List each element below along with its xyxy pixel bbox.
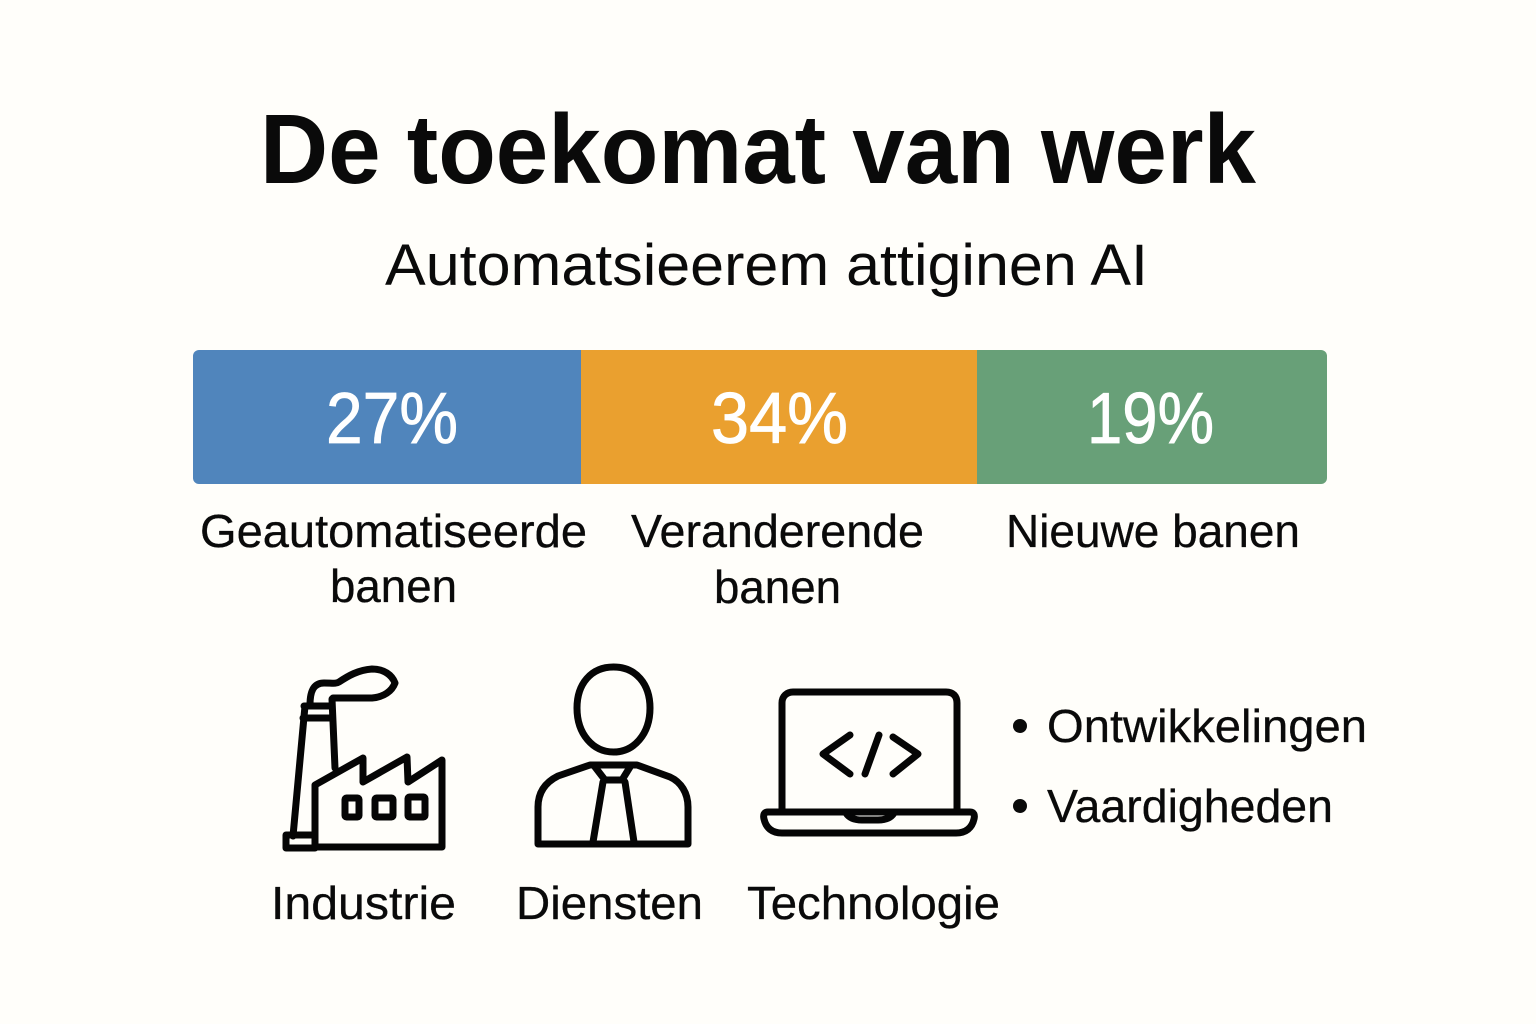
- stacked bar chart: [193, 350, 1327, 484]
- label: changing jobs: Veranderende: [631, 505, 924, 557]
- title: De toekomat van werk: [260, 94, 1256, 204]
- label: Technologie: Technologie: [747, 877, 1000, 929]
- label: automated jobs: [200, 505, 587, 612]
- bar segment: changing jobs 34%: 34%: [711, 379, 848, 459]
- label: Industrie: Industrie: [271, 877, 456, 929]
- bar segment: changing jobs 34%: [581, 350, 977, 484]
- bullet: Ontwikkelingen: Ontwikkelingen: [1047, 700, 1367, 752]
- label: automated jobs: banen: [330, 560, 457, 612]
- label: Diensten: Diensten: [516, 877, 703, 929]
- icon: laptop with code: [764, 692, 974, 833]
- label: changing jobs: banen: [714, 561, 841, 613]
- subtitle: Automatsieerem attiginen AI: [385, 233, 1148, 298]
- label: new jobs: Nieuwe banen: [1006, 505, 1300, 557]
- icon: factory: [286, 669, 442, 848]
- bullet list: [1013, 700, 1367, 832]
- bullet: Vaardigheden: Vaardigheden: [1047, 780, 1333, 832]
- bar segment: new jobs 19%: 19%: [1087, 379, 1214, 459]
- bar segment: automated jobs 27%: 27%: [326, 379, 458, 459]
- icon: person with tie: [538, 667, 688, 844]
- bar segment: automated jobs 27%: [193, 350, 581, 484]
- bar segment: new jobs 19%: [977, 350, 1327, 484]
- label: automated jobs: Geautomatiseerde: [200, 505, 587, 557]
- label: changing jobs: [631, 505, 924, 613]
